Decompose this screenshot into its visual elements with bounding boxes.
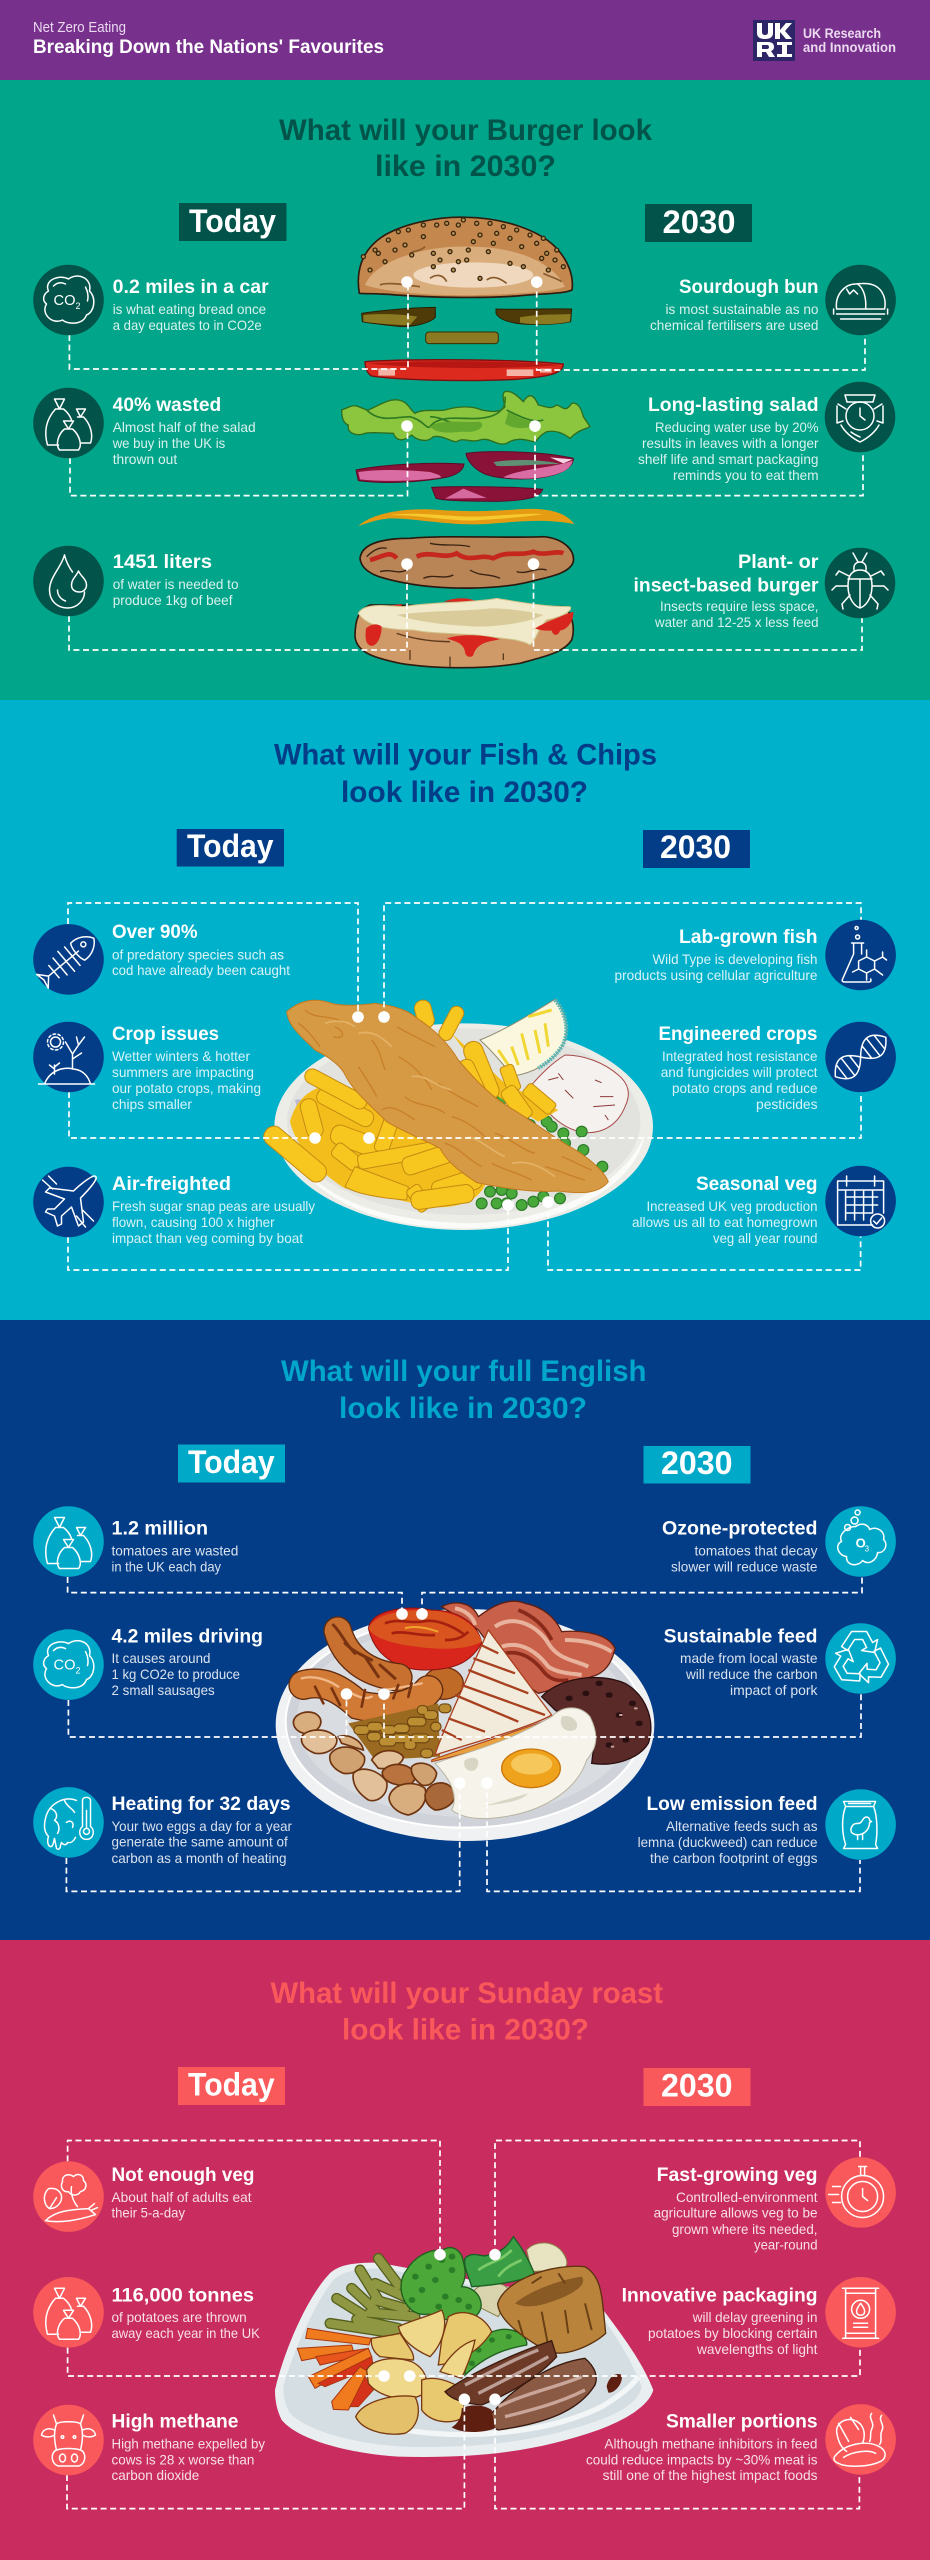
text block	[113, 277, 269, 333]
connector: over 90% to fish	[68, 903, 364, 1023]
label: 2030: 2030	[662, 204, 736, 240]
text block: Heating for 32 days	[112, 1794, 291, 1815]
text block: potato crops and reduce	[672, 1080, 818, 1096]
baked beans	[348, 1703, 447, 1760]
icon: ozone cloud	[825, 1506, 896, 1577]
text block: impact of pork	[730, 1682, 818, 1698]
text block	[650, 277, 819, 333]
roast potatoes	[356, 2310, 492, 2434]
text block	[654, 2165, 818, 2253]
text block	[112, 2165, 254, 2221]
icon: CO2 cloud: 2	[76, 301, 81, 311]
item: 40% wasted	[33, 388, 256, 467]
icon: dry crops	[33, 1022, 104, 1092]
text block	[112, 1174, 315, 1246]
text block: Low emission feed	[646, 1794, 818, 1815]
third sausage	[423, 1667, 463, 1699]
heading: burger: What will your Burger look	[279, 114, 652, 147]
text block: 40% wasted	[113, 395, 221, 416]
text block	[113, 552, 239, 608]
text block: summers are impacting	[112, 1064, 254, 1080]
text block: insect-based burger	[634, 576, 819, 596]
item: innovative packaging	[622, 2277, 896, 2357]
text block: of potatoes are thrown	[112, 2309, 247, 2325]
text block: Seasonal veg	[696, 1174, 818, 1195]
text block	[112, 2285, 260, 2341]
black pudding	[542, 1678, 651, 1764]
label: Today: Today	[189, 203, 276, 239]
panel: burger	[0, 80, 930, 700]
label: 2030	[643, 829, 750, 868]
text block: Long-lasting salad	[648, 395, 818, 416]
icon: ozone cloud: O	[856, 1536, 866, 1550]
battered fish	[287, 1000, 608, 1193]
heading: full English	[281, 1355, 646, 1425]
text block: 0.2 miles in a car	[113, 277, 269, 298]
heading: full English: look like in 2030?	[339, 1392, 587, 1425]
icon: stopwatch	[825, 2157, 896, 2228]
lemon wedge	[480, 999, 566, 1076]
text block: their 5-a-day	[112, 2205, 185, 2221]
connector: air-freighted to peas	[68, 1199, 514, 1270]
text block: wavelengths of light	[696, 2341, 818, 2357]
logo wordmark: and Innovation	[803, 40, 896, 55]
icon: recycle	[825, 1623, 896, 1694]
text block: will delay greening in	[692, 2309, 818, 2325]
text block: High methane	[112, 2412, 238, 2432]
icon: waste bags	[33, 1506, 104, 1577]
mash	[530, 1055, 628, 1133]
header title: Breaking Down the Nations' Favourites	[33, 37, 384, 58]
text block: grown where its needed,	[672, 2221, 818, 2237]
label: Today: Today	[187, 828, 274, 864]
illustration: exploded burger	[342, 217, 590, 668]
label: Today: Today	[188, 2066, 275, 2102]
panel: fish and chips	[0, 700, 930, 1320]
label: 2030	[644, 1445, 750, 1484]
text block: away each year in the UK	[112, 2325, 260, 2341]
connector: plant-based burger	[528, 558, 862, 650]
icon: CO2 cloud: CO	[54, 1657, 76, 1674]
text block	[112, 1024, 261, 1112]
text block: year-round	[754, 2237, 818, 2253]
text block: 1.2 million	[112, 1519, 208, 1540]
text block	[664, 1627, 818, 1698]
text block: water and 12-25 x less feed	[654, 614, 818, 630]
icon: CO2 cloud	[33, 265, 104, 335]
text block: 1 kg CO2e to produce	[112, 1666, 240, 1682]
connector: 1.2 million to tomato	[68, 1577, 408, 1620]
icon: beetle	[825, 548, 895, 618]
text block	[662, 1519, 818, 1574]
illustration: fish and chips plate	[260, 998, 653, 1230]
connector: 40% wasted to salad	[70, 420, 413, 496]
connector: sustainable feed to sausage	[378, 1688, 861, 1737]
connector: long-lasting salad	[529, 420, 863, 496]
fried egg	[435, 1708, 596, 1819]
connector: ozone-protected to tomato	[416, 1577, 862, 1620]
text block: Integrated host resistance	[662, 1048, 818, 1064]
cheese slice	[358, 509, 574, 526]
heading: Sunday roast	[270, 1977, 663, 2047]
label: 2030: 2030	[661, 1445, 732, 1481]
text block: Over 90%	[112, 922, 198, 943]
text block: Lab-grown fish	[679, 927, 818, 948]
item: plant- or insect-based burger	[634, 548, 895, 630]
tomato slice	[365, 360, 563, 381]
text block: Although methane inhibitors in feed	[604, 2436, 818, 2452]
icon: water drops	[33, 546, 104, 616]
text block	[614, 927, 818, 983]
label: Today: Today	[188, 1444, 275, 1480]
text block: generate the same amount of	[112, 1834, 288, 1850]
text block: and fungicides will protect	[661, 1064, 818, 1080]
connector: engineered crops to chips	[363, 1092, 861, 1144]
text block: still one of the highest impact foods	[603, 2467, 818, 2483]
text block: agriculture allows veg to be	[654, 2205, 818, 2221]
connector: high methane to beef	[67, 2394, 470, 2509]
text block: thrown out	[113, 451, 177, 467]
item: low emission feed	[638, 1789, 896, 1866]
pickles	[362, 307, 572, 344]
text block: Fast-growing veg	[657, 2165, 818, 2186]
text block: products using cellular agriculture	[614, 967, 818, 983]
text block: the carbon footprint of eggs	[650, 1850, 818, 1866]
icon: melting globe and thermometer	[33, 1787, 104, 1858]
text block	[112, 1519, 238, 1574]
item: 0.2 miles in a car	[33, 265, 269, 335]
item: fast-growing veg	[654, 2157, 896, 2253]
text block: will reduce the carbon	[685, 1666, 818, 1682]
text block: Plant- or	[738, 552, 819, 573]
heading: burger: like in 2030?	[375, 150, 556, 183]
text block: lemna (duckweed) can reduce	[638, 1834, 818, 1850]
text block: carbon as a month of heating	[112, 1850, 286, 1866]
mushrooms	[293, 1712, 455, 1815]
heading: full English: What will your full English	[281, 1355, 646, 1388]
icon: sourdough loaves	[825, 265, 896, 335]
text block: Insects require less space,	[660, 598, 818, 614]
item: 1451 liters	[33, 546, 239, 616]
heading: burger	[279, 114, 652, 183]
heading: fish and chips	[274, 738, 657, 809]
item: 1.2 million	[33, 1506, 238, 1577]
text block: in the UK each day	[112, 1558, 221, 1574]
text block: 2 small sausages	[112, 1682, 215, 1698]
connector: lab-grown fish	[378, 903, 861, 1023]
text block: Not enough veg	[112, 2165, 254, 2186]
text block	[638, 1794, 818, 1866]
red onion rings	[356, 452, 573, 501]
item: engineered crops	[658, 1022, 896, 1112]
text block: 116,000 tonnes	[112, 2285, 254, 2306]
broccoli	[401, 2237, 534, 2375]
roast beef	[445, 2341, 622, 2432]
item: sustainable feed	[664, 1623, 896, 1698]
text block: veg all year round	[713, 1230, 818, 1246]
text block: a day equates to in CO2e	[113, 317, 262, 333]
text block: allows us all to eat homegrown	[632, 1214, 818, 1230]
text block: chips smaller	[112, 1096, 192, 1112]
plate	[275, 2263, 653, 2457]
connector: innovative packaging to potatoes	[404, 2348, 860, 2382]
text block: chemical fertilisers are used	[650, 317, 818, 333]
text block: cows is 28 x worse than	[112, 2451, 254, 2467]
text block: High methane expelled by	[112, 2436, 265, 2452]
connector: not enough veg to broccoli	[68, 2140, 446, 2260]
item: seasonal veg	[632, 1166, 896, 1246]
connector: seasonal veg to peas	[542, 1196, 861, 1270]
connector: smaller portions to beef	[489, 2394, 859, 2509]
text block: Innovative packaging	[622, 2285, 818, 2306]
item: sourdough bun	[650, 265, 896, 335]
item: high methane	[33, 2405, 265, 2483]
plate	[274, 1023, 653, 1230]
text block	[658, 1024, 818, 1112]
heading: fish and chips: What will your Fish & Chips	[274, 738, 657, 772]
text block: cod have already been caught	[112, 962, 290, 978]
connector: 0.2 miles to bun	[69, 276, 413, 369]
text block	[112, 1627, 263, 1698]
text block: 1451 liters	[113, 552, 212, 573]
icon: waste bags	[33, 388, 104, 458]
icon: CO2 cloud	[33, 1629, 104, 1700]
patty	[360, 537, 573, 588]
text block: produce 1kg of beef	[113, 592, 233, 608]
illustration: full English plate	[276, 1601, 654, 1841]
item: 116,000 tonnes	[33, 2277, 260, 2348]
text block: impact than veg coming by boat	[112, 1230, 303, 1246]
icon: packaging	[825, 2277, 896, 2348]
text block	[112, 2412, 265, 2483]
text block	[112, 395, 256, 467]
icon: steak and smoke	[825, 2404, 896, 2475]
text block: we buy in the UK is	[112, 435, 225, 451]
connector: 116,000 tonnes to potatoes	[68, 2348, 390, 2382]
icon: waste bags	[33, 2277, 104, 2348]
toast	[432, 1630, 552, 1762]
bottom bun	[355, 598, 573, 668]
cauliflower	[473, 2243, 567, 2317]
sausages	[302, 1625, 428, 1708]
item: heating for 32 days	[33, 1787, 292, 1866]
text block: Smaller portions	[666, 2412, 818, 2432]
text block: Crop issues	[112, 1024, 219, 1045]
icon: CO2 cloud: 2	[76, 1666, 81, 1676]
heading: Sunday roast: What will your Sunday roast	[270, 1977, 663, 2010]
label: 2030: 2030	[660, 829, 731, 865]
heading: Sunday roast: look like in 2030?	[342, 2014, 589, 2047]
item: over 90%	[33, 922, 290, 995]
grilled tomato	[368, 1608, 482, 1670]
item: lab-grown fish	[614, 920, 896, 990]
icon: feed bag with chicken	[825, 1789, 896, 1860]
text block	[634, 552, 819, 630]
text block: slower will reduce waste	[671, 1558, 818, 1574]
connector: 1451 liters to patty	[69, 558, 413, 650]
text block: potatoes by blocking certain	[648, 2325, 818, 2341]
text block: made from local waste	[680, 1650, 818, 1666]
icon: plane	[33, 1167, 104, 1237]
peas	[482, 1098, 602, 1205]
item: long-lasting salad	[638, 382, 895, 483]
lettuce	[342, 391, 590, 444]
icon: CO2 cloud: CO	[54, 292, 76, 309]
icon: DNA	[825, 1022, 896, 1092]
icon: calendar	[825, 1166, 896, 1236]
text block: Controlled-environment	[676, 2189, 818, 2205]
carrots	[297, 2328, 373, 2410]
text block: is what eating bread once	[113, 301, 266, 317]
text block: carbon dioxide	[112, 2467, 200, 2483]
item: 4.2 miles driving	[33, 1627, 263, 1700]
text block: shelf life and smart packaging	[638, 451, 818, 467]
item: air-freighted	[33, 1167, 315, 1246]
text block: Engineered crops	[658, 1024, 818, 1045]
text block: flown, causing 100 x higher	[112, 1214, 275, 1230]
text block: Fresh sugar snap peas are usually	[112, 1198, 315, 1214]
icon: clock shield	[825, 382, 895, 452]
item: ozone-protected	[662, 1506, 896, 1577]
text block: Reducing water use by 20%	[655, 419, 818, 435]
header bar	[0, 0, 930, 80]
illustration: Sunday roast plate	[275, 2237, 653, 2457]
icon: cow	[33, 2405, 104, 2475]
text block: could reduce impacts by ~30% meat is	[586, 2451, 818, 2467]
text block: results in leaves with a longer	[642, 435, 819, 451]
text block: tomatoes that decay	[694, 1543, 818, 1559]
item: crop issues	[33, 1022, 261, 1112]
text block: Sourdough bun	[679, 277, 818, 298]
text block	[638, 395, 819, 483]
label: 2030	[645, 204, 752, 242]
plate	[276, 1609, 654, 1841]
label: 2030: 2030	[661, 2068, 732, 2104]
text block: Your two eggs a day for a year	[112, 1818, 292, 1834]
text block: Alternative feeds such as	[666, 1818, 818, 1834]
text block: our potato crops, making	[112, 1080, 261, 1096]
chips	[260, 998, 558, 1213]
connector: fast-growing veg to broccoli	[489, 2140, 860, 2260]
text block: pesticides	[756, 1096, 818, 1112]
text block: Increased UK veg production	[646, 1198, 818, 1214]
text block: It causes around	[112, 1650, 210, 1666]
connector: sourdough to bun	[531, 276, 865, 370]
logo: UKRI	[753, 20, 795, 61]
text block: Ozone-protected	[662, 1519, 818, 1540]
icon: vegetables	[33, 2161, 104, 2232]
item: not enough veg	[33, 2161, 255, 2232]
text block	[632, 1174, 818, 1246]
text block: Almost half of the salad	[113, 419, 256, 435]
text block: of predatory species such as	[112, 946, 284, 962]
panel: full English	[0, 1320, 930, 1940]
text block: Wetter winters & hotter	[112, 1048, 250, 1064]
panel: Sunday roast	[0, 1940, 930, 2560]
bacon	[442, 1601, 615, 1693]
heading: fish and chips: look like in 2030?	[341, 776, 588, 809]
text block: Air-freighted	[112, 1174, 231, 1195]
kicker: Net Zero Eating: Net Zero Eating	[33, 20, 126, 36]
icon: fish skeleton	[33, 924, 104, 995]
text block: 4.2 miles driving	[112, 1627, 263, 1648]
connector: 4.2 miles to sausage	[68, 1688, 352, 1737]
label: 2030	[644, 2068, 750, 2106]
logo wordmark	[803, 26, 896, 55]
connector: crop issues to chips	[69, 1092, 321, 1144]
text block	[586, 2412, 818, 2483]
Yorkshire pudding	[498, 2266, 606, 2353]
text block: About half of adults eat	[112, 2189, 252, 2205]
icon: ozone cloud: 3	[865, 1544, 870, 1554]
top bun	[358, 217, 572, 297]
text block: Wild Type is developing fish	[652, 951, 818, 967]
text block: Sustainable feed	[664, 1627, 818, 1648]
text block	[622, 2285, 818, 2357]
text block: of water is needed to	[113, 576, 239, 592]
text block: reminds you to eat them	[673, 467, 818, 483]
icon: flask	[825, 920, 896, 990]
logo wordmark: UK Research	[803, 26, 881, 41]
text block: is most sustainable as no	[666, 301, 819, 317]
green beans	[330, 2258, 415, 2333]
connector: heating to egg	[66, 1777, 466, 1891]
text block	[112, 1794, 292, 1866]
text block: tomatoes are wasted	[112, 1543, 238, 1559]
connector: low emission feed to egg	[481, 1777, 860, 1891]
text block	[112, 922, 290, 978]
item: smaller portions	[586, 2404, 896, 2483]
